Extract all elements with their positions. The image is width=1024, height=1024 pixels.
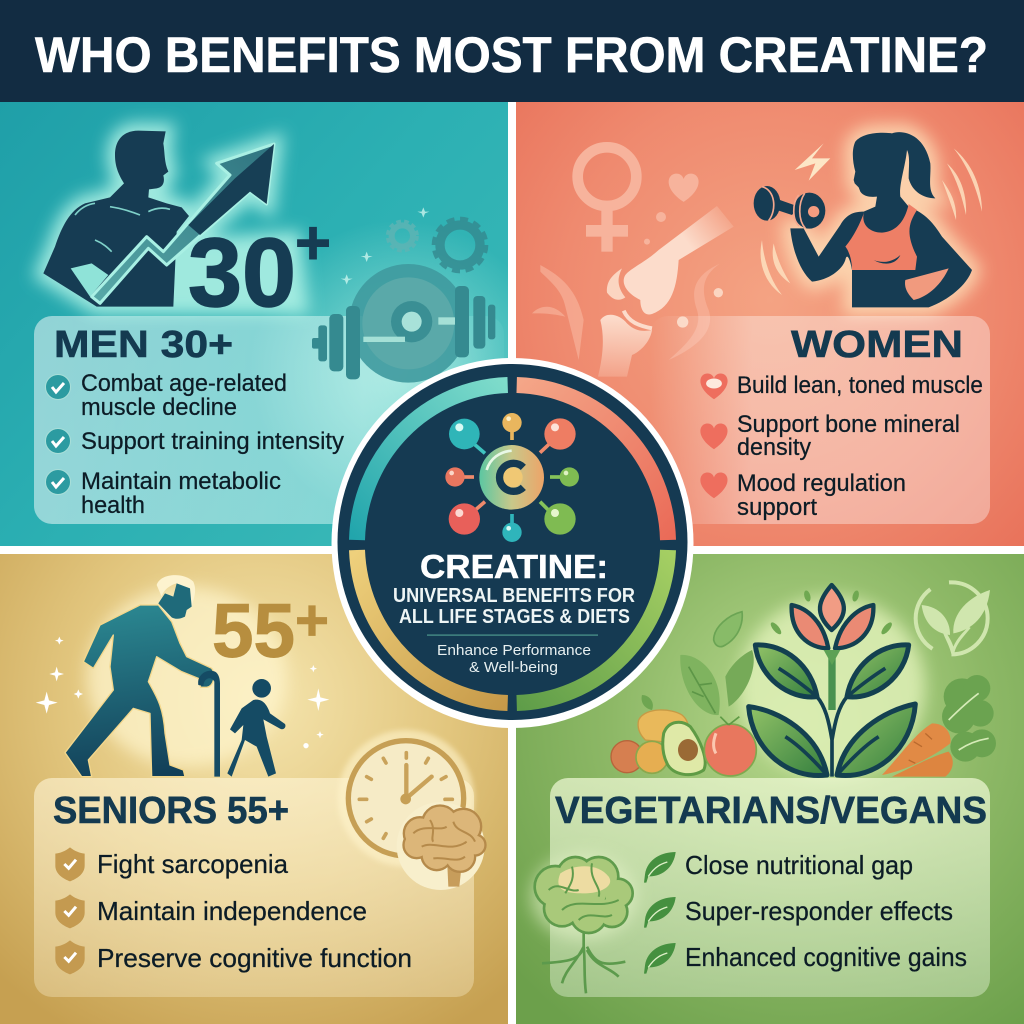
four coloured ring arcs [357,385,668,703]
heading: women: WOMEN [791,324,963,366]
panel: seniors 55+ [34,575,485,997]
badge heading: CREATINE: [420,548,608,585]
title banner: WHO BENEFITS MOST FROM CREATINE? [35,27,988,83]
bullet list: women: support [737,494,817,521]
icon: gears and sparkles [341,207,486,285]
icon: senior with cane and walking child [36,575,329,777]
badge subheading [393,585,635,628]
title banner [0,0,1024,102]
bullet list: men 30+: Support training intensity [81,428,344,455]
bullet list: men 30+ [46,370,344,519]
bullet list: vegetarians/vegans: Enhanced cognitive gains [685,942,967,972]
big number 30+: 30 [188,218,296,327]
badge tagline: Enhance Performance [437,642,591,659]
badge subheading: ALL LIFE STAGES & DIETS [399,606,630,628]
icon: barbell [312,264,495,383]
badge tagline [437,642,591,676]
text card: women [650,316,990,524]
text card: men 30+ [34,316,504,524]
icon: fruits and vegetables [611,695,953,777]
center badge [332,358,694,728]
icon: clock with brain [338,730,485,890]
badge subheading: UNIVERSAL BENEFITS FOR [393,585,635,607]
bullet list: men 30+: muscle decline [81,394,237,421]
text card: vegetarians and vegans [550,778,990,997]
bullet list: women: density [737,434,811,461]
bullet list: seniors 55+ [55,847,412,974]
panel background: men 30+ [0,100,508,546]
icon: man silhouette with rising arrow [43,131,300,307]
heading: men 30+: MEN 30+ [54,324,233,366]
big number 55+: + [295,588,329,653]
icon: knee joint bones [532,206,734,377]
panel background: vegetarians and vegans [516,554,1024,1024]
big number 55+: 55 [212,589,295,674]
big number 30+ [188,209,331,327]
big number 30+: + [295,209,331,278]
bullet list: men 30+: health [81,492,145,519]
bullet list: men 30+: Maintain metabolic [81,468,281,495]
bullet list: vegetarians/vegans [644,850,967,974]
bullet list: women: Build lean, toned muscle [737,372,983,399]
panel: men 30+ [34,131,504,524]
icon: plant with flower [749,585,915,777]
icon: creatine molecule [445,413,579,542]
panel background: seniors 55+ [0,554,508,1024]
bullet list: vegetarians/vegans: Super-responder effects [685,896,953,926]
bullet list: women [700,372,983,521]
bullet list: men 30+: Combat age-related [81,370,287,397]
panel background: women [516,100,1024,546]
icon: woman lifting dumbbell [754,132,982,307]
bullet list: women: Support bone mineral [737,411,960,438]
text card: seniors 55+ [34,778,474,997]
badge tagline: & Well-being [469,659,558,676]
icon: female symbol, heart and dots [578,147,699,252]
panel: women [532,132,990,524]
heading: seniors 55+: SENIORS 55+ [53,790,289,832]
bullet list: seniors 55+: Preserve cognitive function [97,943,412,973]
bullet list: women: Mood regulation [737,470,906,497]
heading: vegetarians/vegans: VEGETARIANS/VEGANS [555,790,987,832]
bullet list: vegetarians/vegans: Close nutritional gap [685,850,913,880]
icon: leaf badge [916,582,990,655]
panel: vegetarians and vegans [530,582,996,997]
icon: brain with roots [530,853,637,993]
icon: leafy greens background [680,597,996,777]
bullet list: seniors 55+: Maintain independence [97,896,367,926]
bullet list: seniors 55+: Fight sarcopenia [97,849,289,879]
